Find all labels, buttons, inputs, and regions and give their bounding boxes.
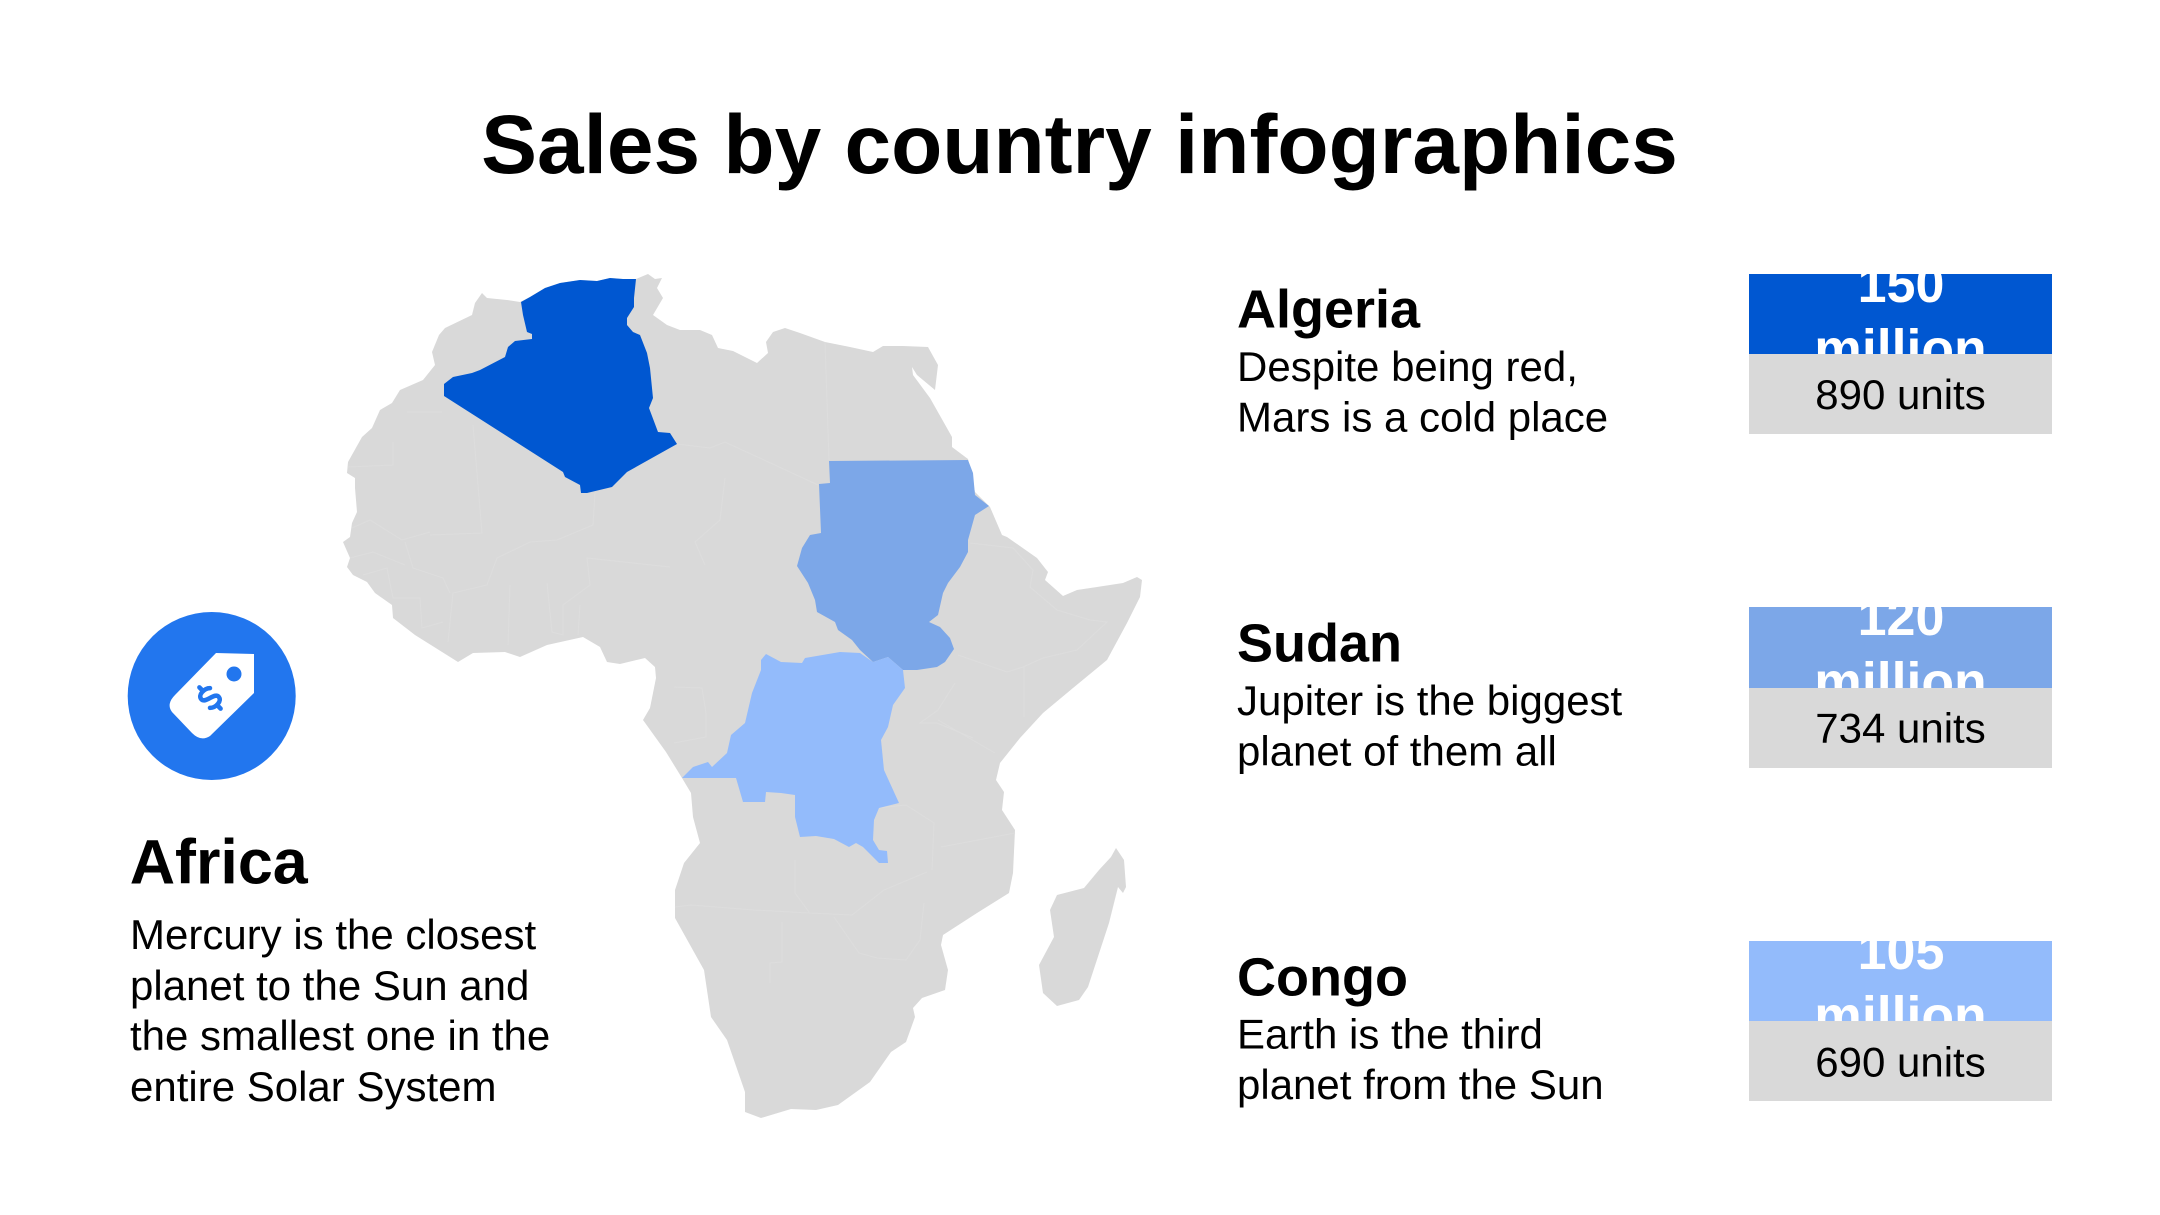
- stat: 890 units: [1749, 354, 2052, 434]
- stat: 734 units: 734 units: [1815, 704, 1986, 752]
- stat: 120 million: 120: [1858, 589, 1944, 647]
- icon: price tag in circle: [128, 612, 296, 780]
- map: Congo: [682, 652, 905, 863]
- text: Sudan description: planet of them all: [1237, 728, 1557, 774]
- stat: 120 million: [1749, 607, 2052, 688]
- text: Africa description: the smallest one in the: [130, 1012, 550, 1059]
- text: Algeria description: Despite being red,: [1237, 343, 1578, 390]
- text: Congo description: planet from the Sun: [1237, 1061, 1604, 1108]
- heading: Sudan: Sudan: [1237, 614, 1402, 674]
- text: Congo description: Earth is the third: [1237, 1010, 1543, 1058]
- heading: Congo: Congo: [1237, 948, 1408, 1008]
- stat: 105 million: [1749, 941, 2052, 1021]
- title: Sales by country infographics: [481, 97, 1678, 191]
- text: Sudan description: Jupiter is the biggest: [1237, 677, 1623, 724]
- row: Sudan: [1238, 607, 2052, 774]
- stat: 734 units: [1749, 688, 2052, 768]
- map: Africa: [343, 274, 1142, 1118]
- map: Madagascar: [1039, 848, 1126, 1006]
- text: Africa description: planet to the Sun and: [130, 962, 529, 1009]
- heading: Algeria: Algeria: [1237, 280, 1421, 340]
- text: Algeria description: Mars is a cold place: [1237, 394, 1608, 440]
- stat: 150 million: 150: [1858, 256, 1944, 314]
- map: Algeria: [444, 278, 677, 493]
- row: Congo: [1239, 941, 2052, 1108]
- map: continent base: [343, 274, 1142, 1118]
- stat: 690 units: 690 units: [1815, 1038, 1986, 1086]
- text: Africa description: Mercury is the closest: [130, 911, 536, 958]
- heading: Africa: Africa: [130, 828, 309, 898]
- stat: 120 million: million: [1814, 653, 1987, 712]
- stat: 150 million: [1749, 274, 2052, 354]
- stat: 150 million: million: [1814, 320, 1987, 379]
- stat: 105 million: million: [1814, 987, 1987, 1046]
- text: Africa description: entire Solar System: [130, 1063, 496, 1110]
- row: Algeria: [1238, 274, 2052, 440]
- map: Sudan: [797, 460, 989, 670]
- stat: 105 million: 105: [1858, 923, 1944, 981]
- stat: 690 units: [1749, 1021, 2052, 1101]
- stat: 890 units: 890 units: [1815, 371, 1986, 418]
